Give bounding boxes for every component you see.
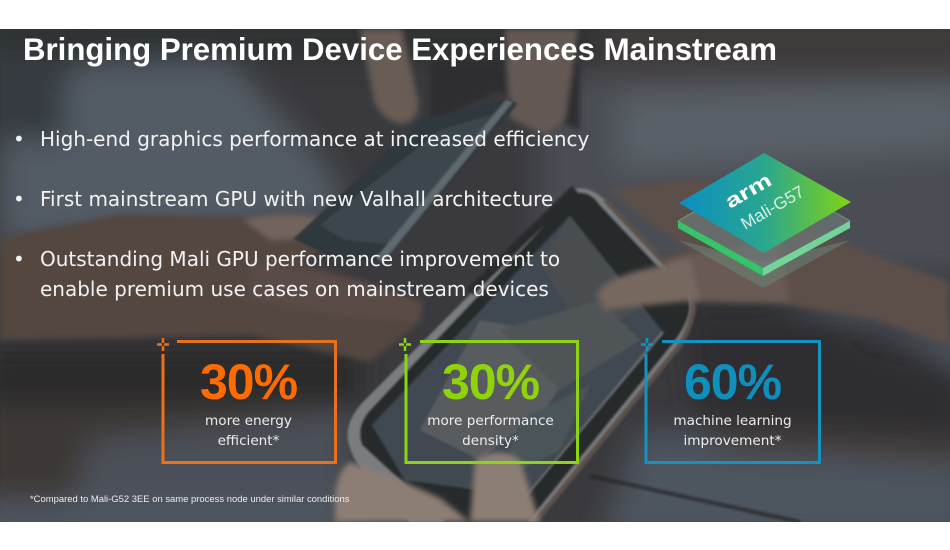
bullet list: enable premium use cases on mainstream devices bbox=[40, 277, 549, 301]
bullet list: First mainstream GPU with new Valhall architecture bbox=[40, 187, 553, 211]
caption: improvement* bbox=[683, 433, 782, 449]
icon: arm Mali-G57 chip bbox=[677, 153, 851, 288]
bullet 2 bbox=[13, 187, 553, 211]
bullet 3 bbox=[13, 247, 560, 301]
right phone body bbox=[348, 188, 693, 522]
bullet 2: • bbox=[13, 187, 25, 211]
bullet list bbox=[13, 127, 589, 301]
caption bbox=[673, 413, 792, 449]
bullet 3: • bbox=[13, 247, 25, 271]
caption: density* bbox=[462, 433, 519, 449]
value: 30% bbox=[200, 354, 297, 410]
right phone top and side rim bbox=[470, 189, 575, 292]
caption: efficient* bbox=[218, 433, 279, 449]
stat box: machine learning bbox=[641, 338, 821, 464]
caption: machine learning bbox=[673, 413, 792, 429]
green frame bbox=[399, 338, 579, 464]
left hand bbox=[0, 214, 423, 362]
caption: more performance bbox=[427, 413, 554, 429]
icon: arm Mali-G57 chip: Mali-G57 bbox=[738, 182, 808, 233]
top hand fingers bbox=[430, 60, 580, 130]
icon: arm Mali-G57 chip: arm bbox=[722, 169, 776, 213]
top dark band bbox=[0, 10, 950, 60]
caption bbox=[427, 413, 554, 449]
value: 30% bbox=[442, 354, 539, 410]
orange frame bbox=[157, 338, 337, 464]
left phone bbox=[293, 99, 517, 262]
title: Bringing Premium Device Experiences Mainstream bbox=[23, 32, 777, 67]
bullet 1 bbox=[13, 127, 589, 151]
bullet list: Outstanding Mali GPU performance improvement to bbox=[40, 247, 560, 271]
lower right bbox=[680, 300, 950, 450]
upper right table bbox=[540, 75, 950, 275]
footnote: *Compared to Mali-G52 3EE on same process node under similar conditions bbox=[30, 494, 349, 505]
stat box: performance bbox=[399, 338, 579, 464]
stat box: energy bbox=[157, 338, 337, 464]
lower left bbox=[0, 345, 360, 405]
blue frame bbox=[641, 338, 821, 464]
bullet list: High-end graphics performance at increased efficiency bbox=[40, 127, 589, 151]
table dark line bbox=[590, 476, 800, 522]
bullet 1: • bbox=[13, 127, 25, 151]
right phone screen bbox=[372, 216, 663, 496]
right hand bbox=[597, 178, 950, 345]
upper left table bbox=[0, 62, 345, 245]
caption bbox=[205, 413, 292, 449]
value: 60% bbox=[684, 354, 781, 410]
caption: more energy bbox=[205, 413, 292, 429]
